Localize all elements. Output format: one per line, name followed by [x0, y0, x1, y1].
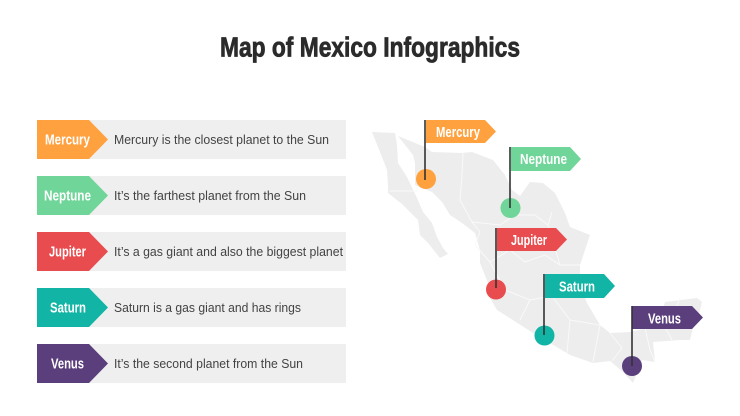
- list row: Jupiter: Jupiter: [49, 244, 86, 260]
- map pin flag: Jupiter: [486, 228, 567, 300]
- map pin flag: Saturn: [534, 274, 615, 346]
- list row: Venus: [37, 344, 346, 383]
- map pin flag: Venus: [622, 306, 703, 376]
- map pin flag: Mercury: [416, 120, 496, 189]
- list row: Mercury: Mercury is the closest planet to the Sun: [114, 132, 329, 147]
- list row: Neptune: Neptune: [44, 188, 91, 204]
- list row: Neptune: [37, 176, 346, 215]
- list row: Mercury: Mercury: [45, 132, 90, 148]
- list row: Saturn: Saturn is a gas giant and has rings: [114, 300, 301, 315]
- list row: Venus: It’s the second planet from the Sun: [114, 356, 303, 371]
- map of Mexico: [372, 132, 702, 383]
- list row: Jupiter: It’s a gas giant and also the biggest planet: [114, 244, 343, 259]
- list row: Venus: Venus: [51, 356, 84, 372]
- map pin flag: Venus: Venus: [648, 312, 681, 328]
- map pin flag: Neptune: Neptune: [520, 152, 567, 168]
- list row: Saturn: Saturn: [50, 300, 86, 316]
- list row: Jupiter: [37, 232, 346, 271]
- map pin flag: Mercury: Mercury: [436, 125, 480, 141]
- list row: Neptune: It’s the farthest planet from the Sun: [114, 188, 306, 203]
- title: Map of Mexico Infographics: [220, 32, 520, 62]
- map pin flag: Saturn: Saturn: [559, 280, 595, 296]
- list row: Saturn: [37, 288, 346, 327]
- map pin flag: Neptune: [500, 147, 581, 218]
- map pin flag: Jupiter: Jupiter: [511, 233, 547, 249]
- list row: Mercury: [37, 120, 346, 159]
